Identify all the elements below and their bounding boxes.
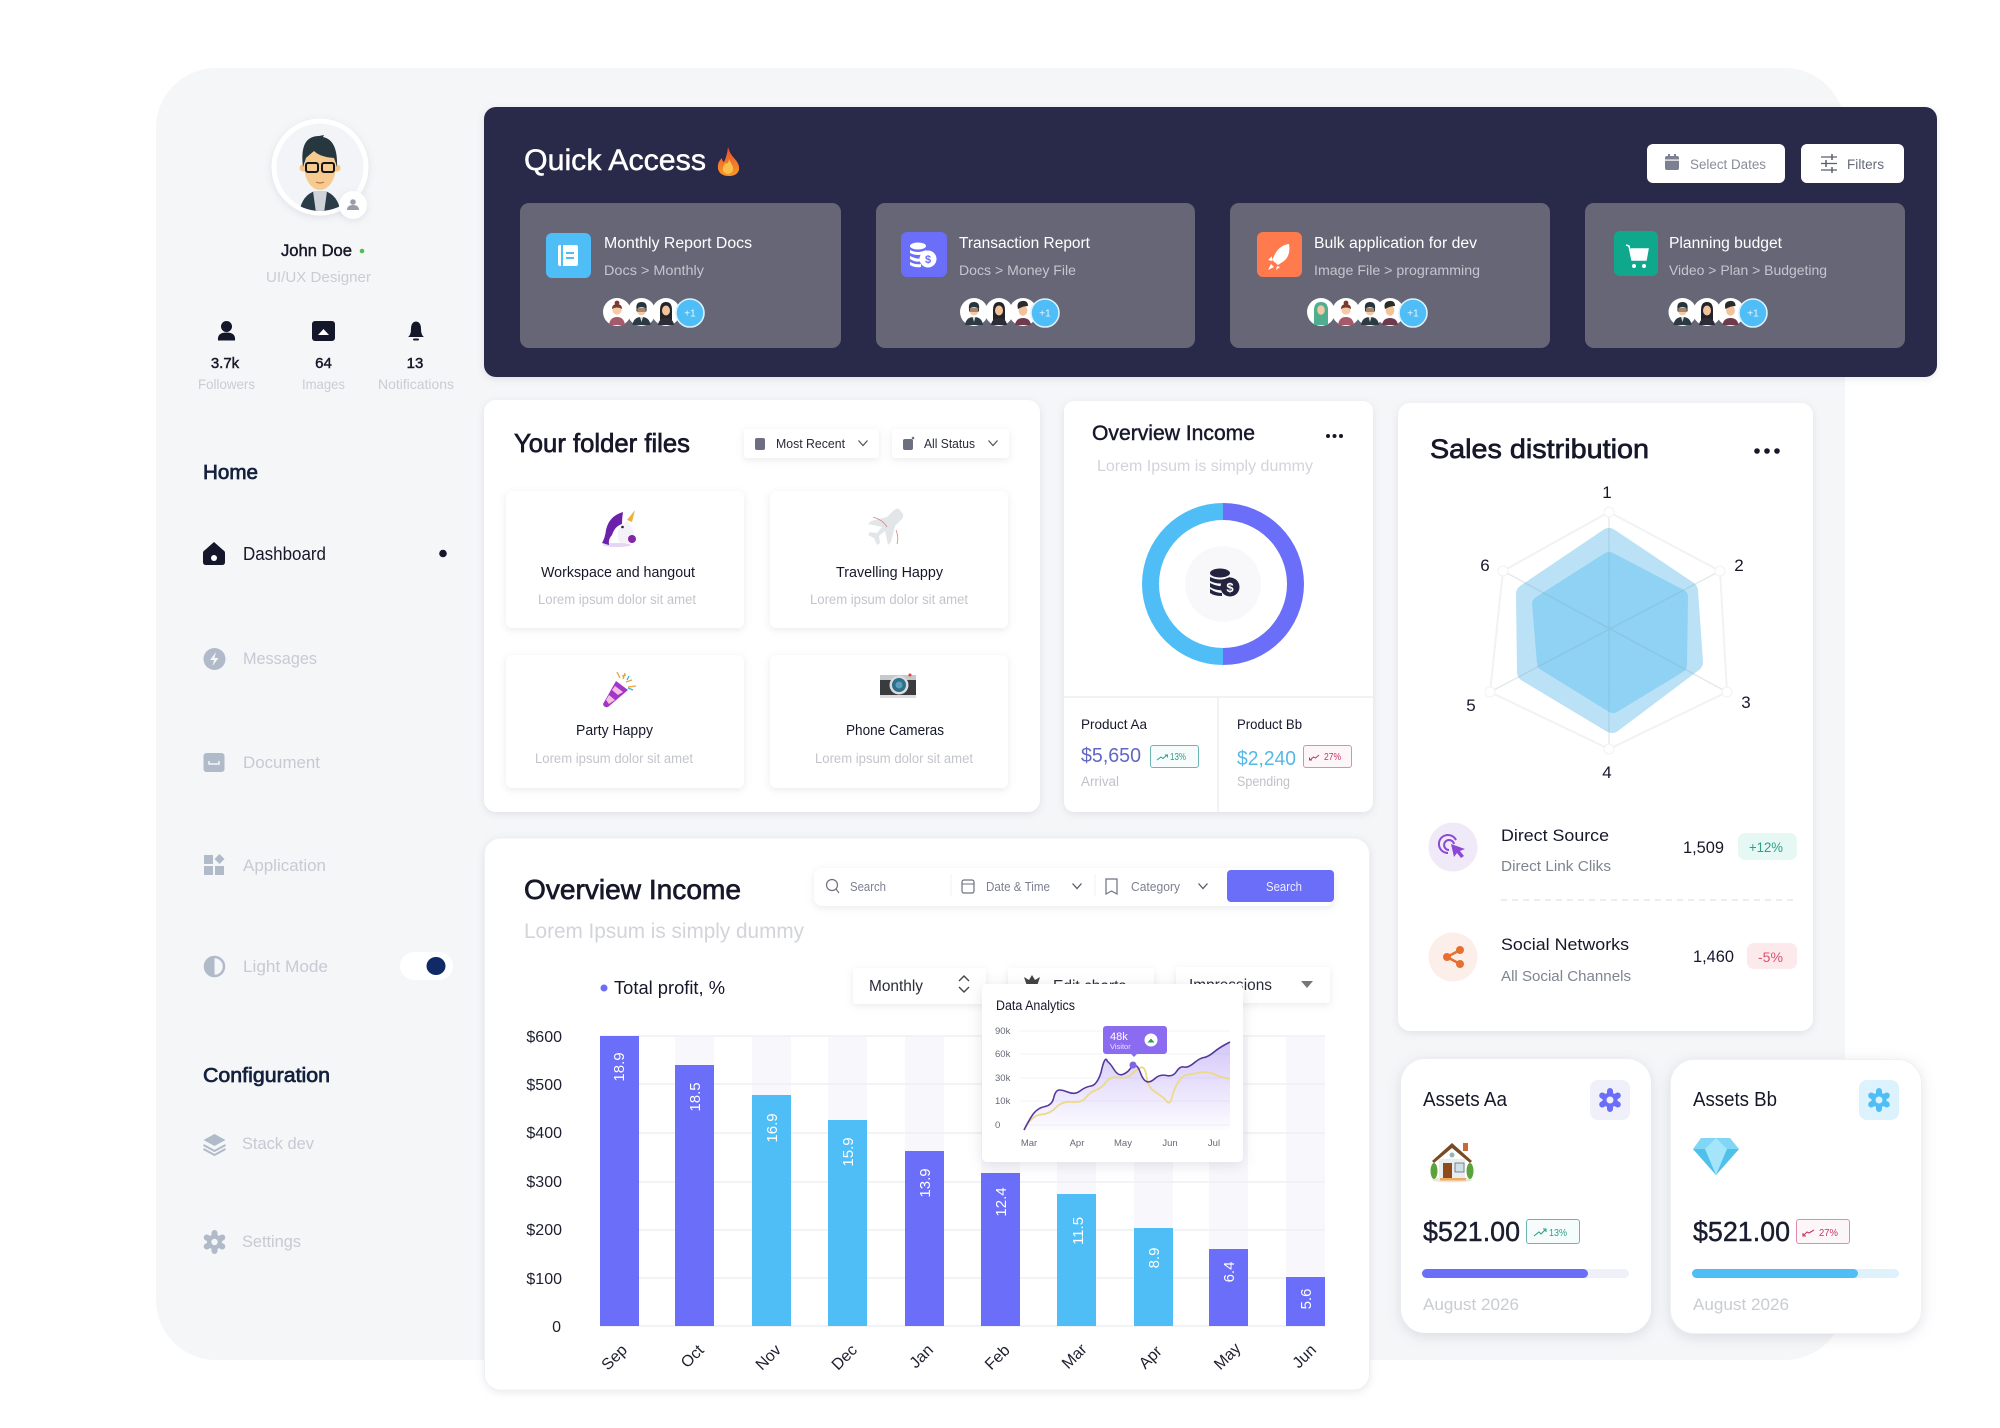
heading: home: Home <box>203 462 258 484</box>
radar axis labels: 2 <box>1734 556 1744 575</box>
icon: diamond <box>1693 1138 1739 1175</box>
bar value labels: 11.5 <box>1070 1217 1087 1245</box>
folder card: workspace <box>506 491 744 628</box>
folder card: workspace: Lorem ipsum dolor sit amet <box>538 592 696 607</box>
stat: product bb: Product Bb <box>1237 716 1302 732</box>
subtitle: Lorem Ipsum is simply dummy <box>1097 458 1313 475</box>
heading: Sales distribution <box>1430 434 1649 464</box>
button: filters <box>1801 144 1904 183</box>
search button: Search <box>1266 879 1302 894</box>
x axis labels: Apr <box>1136 1343 1166 1373</box>
row: social networks: All Social Channels <box>1501 968 1631 985</box>
icon: party popper <box>603 672 636 707</box>
row: direct source: Direct Link Cliks <box>1501 858 1611 875</box>
nav: settings <box>207 1232 301 1251</box>
progress bar <box>1692 1269 1899 1278</box>
panel: sales distribution <box>1398 403 1813 1031</box>
button: select dates: Select Dates <box>1690 157 1766 172</box>
popup: data analytics: Data Analytics <box>996 998 1075 1013</box>
popup tooltip <box>1103 1026 1167 1057</box>
nav: light mode: Light Mode <box>243 957 328 976</box>
badge: +12%: +12% <box>1749 839 1783 855</box>
profile name <box>266 241 371 286</box>
dropdown: monthly <box>853 968 986 1004</box>
folder card: cameras: Lorem ipsum dolor sit amet <box>815 751 973 766</box>
bar value labels: 15.9 <box>840 1137 857 1167</box>
icon: coins <box>901 232 947 277</box>
icon: camera <box>880 674 916 698</box>
y axis labels <box>526 1029 562 1336</box>
profile avatar <box>274 121 367 219</box>
x axis labels: Nov <box>753 1342 785 1374</box>
card: planning budget: Video > Plan > Budgeting <box>1669 262 1827 278</box>
stat: images: 64 <box>315 355 332 372</box>
popup x labels <box>1021 1138 1220 1149</box>
popup y labels: 10k <box>995 1096 1011 1107</box>
nav: light mode <box>205 957 328 976</box>
icon: house <box>1430 1143 1474 1182</box>
stat: images <box>302 321 345 392</box>
button: select dates <box>1647 144 1785 183</box>
card: monthly report docs: Monthly Report Docs <box>604 235 752 252</box>
stat: images: Images <box>302 376 345 392</box>
card: assets aa: $521.00 <box>1423 1216 1520 1247</box>
radar axis labels: 6 <box>1480 556 1490 575</box>
bar value labels <box>611 1052 1315 1309</box>
card: bulk application <box>1230 203 1550 348</box>
icon: coins <box>1210 568 1240 596</box>
popup tooltip: 48k <box>1110 1031 1128 1043</box>
avatars <box>1668 298 1767 327</box>
stat: product bb: 27% <box>1324 752 1341 763</box>
x axis labels: Feb <box>982 1342 1014 1374</box>
card: assets bb <box>1670 1060 1922 1334</box>
y axis labels: $100 <box>526 1271 562 1288</box>
popup y labels <box>995 1026 1011 1131</box>
dropdown: impressions: Impressions <box>1189 977 1272 994</box>
nav: messages: Messages <box>243 649 317 668</box>
nav: dashboard: Dashboard <box>243 544 326 564</box>
dropdown: all status: All Status <box>924 437 975 451</box>
panel: overview income chart <box>484 838 1370 1390</box>
badge: 13% <box>1526 1220 1580 1244</box>
card: transaction report: Docs > Money File <box>959 262 1076 278</box>
icon: gear button <box>1859 1080 1899 1120</box>
nav: settings: Settings <box>242 1232 301 1251</box>
stat: product aa: 13% <box>1170 752 1186 763</box>
card: bulk application: Image File > programming <box>1314 262 1480 278</box>
dropdown: all status <box>892 429 1009 458</box>
dropdown: most recent: Most Recent <box>776 437 846 451</box>
button: filters: Filters <box>1847 157 1884 172</box>
popup y labels: 0 <box>995 1120 1000 1131</box>
sidebar <box>198 121 454 1251</box>
stat: followers: Followers <box>198 376 255 392</box>
toggle switch <box>400 952 453 980</box>
search bar: Date & Time <box>986 879 1050 894</box>
y axis labels: 0 <box>552 1319 561 1336</box>
search bar: Search <box>850 879 886 894</box>
x axis labels: Jan <box>907 1342 937 1372</box>
nav: application <box>204 854 326 875</box>
menu dots <box>1754 448 1780 454</box>
popup tooltip: Visitor <box>1110 1042 1131 1051</box>
row: social networks: 1,460 <box>1693 947 1734 966</box>
subtitle: Lorem Ipsum is simply dummy <box>524 920 804 943</box>
stat: product bb: $2,240 <box>1237 748 1296 770</box>
card: assets aa: Assets Aa <box>1423 1089 1508 1111</box>
x axis labels: Dec <box>829 1342 861 1374</box>
dashboard background panel <box>156 68 1845 1360</box>
dropdown: most recent <box>744 429 879 458</box>
card: bulk application: Bulk application for dev <box>1314 235 1477 252</box>
nav: dashboard <box>203 542 447 565</box>
panel: your folder files <box>484 400 1040 812</box>
nav: application: Application <box>243 856 326 875</box>
heading: configuration: Configuration <box>203 1065 330 1087</box>
icon: coins: $ <box>1226 580 1234 595</box>
x axis labels <box>599 1340 1320 1374</box>
x axis labels: May <box>1211 1340 1245 1374</box>
card: assets aa: August 2026 <box>1423 1295 1519 1314</box>
folder card: travelling: Travelling Happy <box>836 564 943 581</box>
menu dots <box>1326 434 1343 438</box>
row: direct source <box>1428 822 1797 875</box>
row: direct source: 1,509 <box>1683 838 1724 857</box>
folder card: workspace: Workspace and hangout <box>541 564 696 581</box>
x axis labels: Sep <box>599 1342 631 1374</box>
icon: rocket <box>1257 232 1302 277</box>
popup x labels: Mar <box>1021 1138 1037 1149</box>
stat: followers: 3.7k <box>211 355 240 372</box>
bar tracks and grid <box>600 1036 1325 1326</box>
search bar <box>814 868 1334 906</box>
nav: messages <box>204 648 317 670</box>
stat: product aa: Arrival <box>1081 774 1119 789</box>
stat: notifications: Notifications <box>378 376 454 392</box>
bar value labels: 12.4 <box>993 1187 1010 1217</box>
folder card: travelling <box>770 491 1008 628</box>
icon: plane <box>868 509 903 545</box>
dropdown: monthly: Monthly <box>869 978 923 995</box>
card: assets bb: August 2026 <box>1693 1295 1789 1314</box>
y axis labels: $400 <box>526 1125 562 1142</box>
card: transaction report: Transaction Report <box>959 235 1091 252</box>
progress bar <box>1422 1269 1629 1278</box>
heading: Overview Income <box>524 874 741 905</box>
icon: coins: $ <box>925 254 931 266</box>
radar chart <box>1466 483 1751 782</box>
x axis labels: Oct <box>678 1342 708 1372</box>
nav: stack dev: Stack dev <box>242 1134 314 1153</box>
avatars <box>960 298 1059 327</box>
folder card: cameras <box>770 655 1008 788</box>
stat: product aa: $5,650 <box>1081 745 1141 767</box>
card: assets bb: $521.00 <box>1693 1216 1790 1247</box>
folder card: party <box>506 655 744 788</box>
stat: notifications <box>378 322 454 392</box>
folder card: travelling: Lorem ipsum dolor sit amet <box>810 592 968 607</box>
y axis labels: $300 <box>526 1174 562 1191</box>
radar axis labels: 4 <box>1602 763 1612 782</box>
radar axis labels: 3 <box>1741 693 1751 712</box>
popup y labels: 60k <box>995 1049 1011 1060</box>
folder card: cameras: Phone Cameras <box>846 722 944 739</box>
stat: followers <box>198 321 255 392</box>
row: social networks: Social Networks <box>1501 935 1629 954</box>
stat: product aa: Product Aa <box>1081 716 1147 732</box>
icon: notebook <box>546 233 591 278</box>
y axis labels: $600 <box>526 1029 562 1046</box>
card: monthly report docs <box>520 203 841 348</box>
bar value labels: 6.4 <box>1221 1262 1238 1282</box>
nav: stack dev <box>204 1134 314 1155</box>
radar axis labels: 1 <box>1602 483 1612 502</box>
badge: 27% <box>1796 1220 1850 1244</box>
stat: product bb: Spending <box>1237 774 1290 789</box>
icon: unicorn <box>602 510 636 547</box>
badge: 13%: 13% <box>1549 1227 1567 1239</box>
radar axis labels: 5 <box>1466 696 1476 715</box>
legend: Total profit, % <box>614 977 725 998</box>
popup x labels: Jul <box>1208 1138 1220 1149</box>
avatars <box>603 298 704 327</box>
bar value labels: 18.5 <box>687 1082 704 1112</box>
badge: 27%: 27% <box>1819 1227 1838 1239</box>
bar value labels: 13.9 <box>917 1168 934 1198</box>
dropdown: edit <box>1008 968 1154 1004</box>
bars <box>600 1036 1325 1326</box>
popup x labels: Apr <box>1070 1138 1084 1149</box>
card: assets aa <box>1401 1059 1651 1333</box>
popup line chart <box>1024 1042 1230 1130</box>
card: planning budget <box>1585 203 1905 348</box>
popup y labels: 30k <box>995 1073 1011 1084</box>
badge: -5%: -5% <box>1758 949 1783 965</box>
profile name: UI/UX Designer <box>266 269 371 286</box>
badge: -5% <box>1747 943 1797 969</box>
x axis labels: Mar <box>1059 1341 1091 1373</box>
panel: quick access <box>484 107 1937 377</box>
popup x labels: Jun <box>1162 1138 1178 1149</box>
bar value labels: 18.9 <box>611 1052 628 1082</box>
icon: share <box>1428 932 1478 982</box>
heading: folder files: Your folder files <box>514 428 690 458</box>
nav: document: Document <box>243 753 320 772</box>
folder card: party: Party Happy <box>576 722 653 739</box>
donut chart <box>1142 503 1304 665</box>
stat: product aa <box>1081 716 1198 789</box>
dropdown: impressions <box>1176 967 1330 1003</box>
heading: Overview Income <box>1092 422 1255 445</box>
avatars <box>1307 298 1427 327</box>
y axis labels: $500 <box>526 1077 562 1094</box>
nav: document <box>204 753 320 772</box>
bar value labels: 8.9 <box>1146 1248 1163 1268</box>
bar value labels: 5.6 <box>1298 1289 1315 1309</box>
heading: quick access: Quick Access <box>524 144 706 177</box>
y axis labels: $200 <box>526 1222 562 1239</box>
search button <box>1227 870 1334 902</box>
icon: cursor click <box>1428 822 1478 872</box>
popup x labels: May <box>1114 1138 1132 1149</box>
folder card: party: Lorem ipsum dolor sit amet <box>535 751 693 766</box>
panel: overview income donut <box>1064 401 1373 812</box>
card: transaction report <box>876 203 1195 348</box>
card: monthly report docs: Docs > Monthly <box>604 262 704 278</box>
card: assets bb: Assets Bb <box>1693 1089 1777 1111</box>
row: social networks <box>1428 932 1797 985</box>
x axis labels: Jun <box>1290 1342 1320 1372</box>
profile name: John Doe <box>281 241 352 260</box>
stat: product bb <box>1237 716 1352 789</box>
icon: gear button <box>1590 1080 1630 1120</box>
dropdown: edit: Edit charts <box>1053 978 1126 995</box>
card: planning budget: Planning budget <box>1669 235 1783 252</box>
row: direct source: Direct Source <box>1501 826 1609 845</box>
icon: fire <box>718 147 739 176</box>
bar value labels: 16.9 <box>764 1113 781 1143</box>
popup: data analytics <box>982 984 1243 1162</box>
popup y labels: 90k <box>995 1026 1011 1037</box>
badge: +12% <box>1738 833 1797 860</box>
bar chart <box>526 1029 1325 1374</box>
radar axis labels <box>1466 483 1751 782</box>
search bar: Category <box>1131 879 1180 894</box>
icon: cart <box>1614 231 1658 276</box>
stat: notifications: 13 <box>407 355 423 372</box>
